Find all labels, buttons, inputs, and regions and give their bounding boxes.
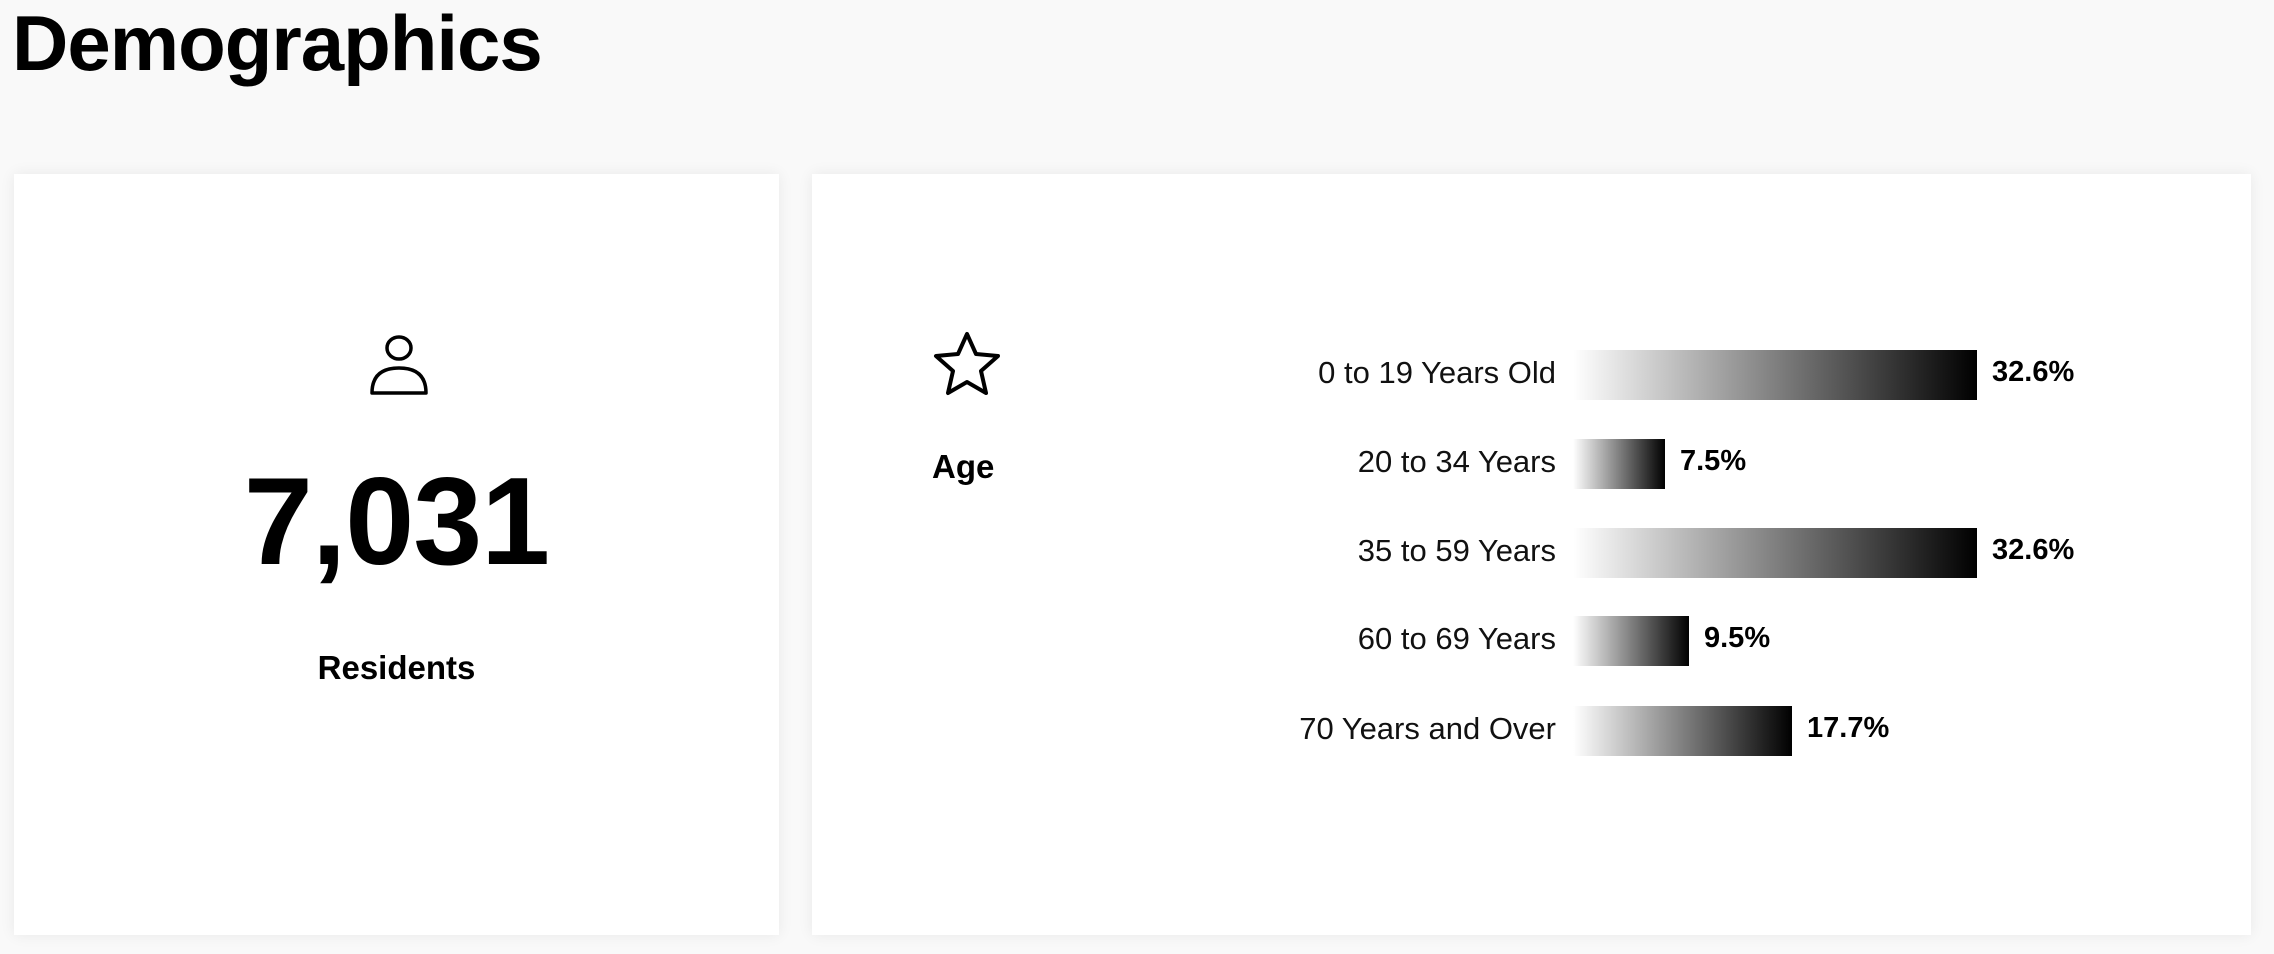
label: residents: Residents — [318, 649, 475, 686]
row 0-19: 32.6% — [1992, 356, 2074, 388]
row 20-34: 20 to 34 Years — [1358, 444, 1556, 479]
row 35-59 — [1358, 528, 2074, 578]
big number: 7,031 — [244, 453, 549, 591]
row 70+: 70 Years and Over — [1299, 711, 1556, 746]
label: age: Age — [932, 448, 994, 485]
bar chart — [1299, 350, 2074, 756]
row 20-34 — [1358, 439, 1746, 489]
row 60-69: 9.5% — [1704, 622, 1770, 654]
row 70+: 17.7% — [1807, 712, 1889, 744]
icon: person — [370, 335, 428, 395]
icon: star — [934, 332, 1000, 396]
title: Demographics — [12, 0, 542, 87]
row 0-19: 0 to 19 Years Old — [1318, 355, 1556, 390]
row 70+ — [1299, 706, 1889, 756]
row 60-69: 60 to 69 Years — [1358, 621, 1556, 656]
row 35-59: 32.6% — [1992, 534, 2074, 566]
row 60-69 — [1358, 616, 1770, 666]
row 0-19 — [1318, 350, 2074, 400]
row 20-34: 7.5% — [1680, 445, 1746, 477]
panel: residents — [14, 174, 779, 935]
row 35-59: 35 to 59 Years — [1358, 533, 1556, 568]
panel: age — [812, 174, 2251, 935]
